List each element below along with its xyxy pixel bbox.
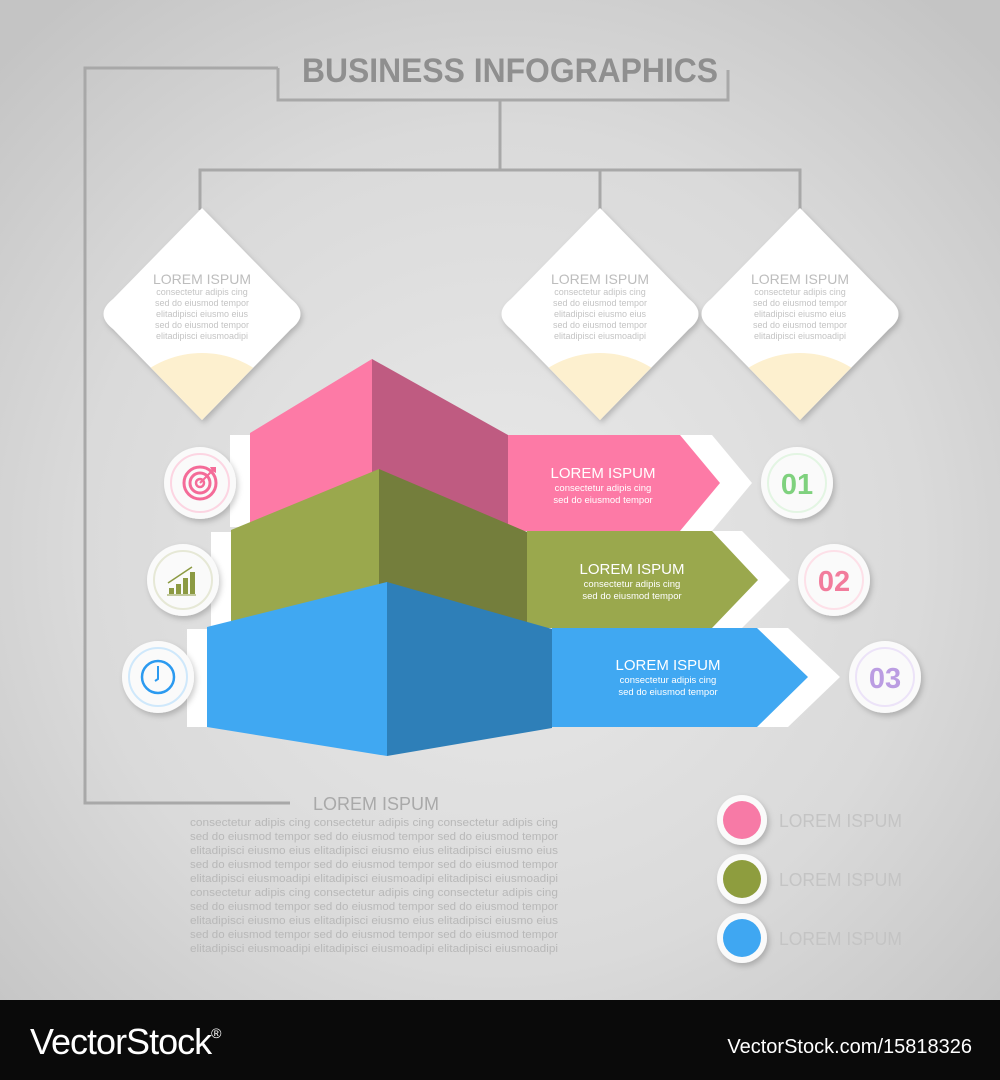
diamond card 1: sed do eiusmod tempor	[155, 298, 249, 308]
diamond card 2: consectetur adipis cing	[554, 287, 646, 297]
number 02	[798, 544, 870, 616]
diamond card 2: elitadipisci eiusmoadipi	[554, 331, 646, 341]
diamond card 3: sed do eiusmod tempor	[753, 320, 847, 330]
icon: clock	[122, 641, 194, 713]
bottom text block: elitadipisci eiusmoadipi elitadipisci eiusmoadipi elitadipisci eiusmoadipi	[190, 943, 558, 955]
number 02: 02	[818, 566, 850, 598]
diamond card 3: elitadipisci eiusmo eius	[754, 309, 847, 319]
diamond card 2: sed do eiusmod tempor	[553, 320, 647, 330]
footer bar	[0, 1000, 1000, 1080]
title: BUSINESS INFOGRAPHICS	[302, 52, 718, 90]
bar 2 green: LOREM ISPUM	[579, 561, 685, 578]
bottom text block: consectetur adipis cing consectetur adipis cing consectetur adipis cing	[190, 817, 558, 829]
bottom text block: sed do eiusmod tempor sed do eiusmod tempor sed do eiusmod tempor	[190, 929, 558, 941]
diamond card 3	[702, 208, 902, 424]
legend: LOREM ISPUM	[779, 929, 902, 949]
diamond card 3: LOREM ISPUM	[751, 271, 849, 287]
bottom text block: LOREM ISPUM	[313, 794, 439, 814]
legend: LOREM ISPUM	[779, 811, 902, 831]
bar 2 green: consectetur adipis cing	[584, 579, 680, 590]
bar 1 pink: sed do eiusmod tempor	[553, 495, 653, 506]
bottom text block: elitadipisci eiusmo eius elitadipisci eiusmo eius elitadipisci eiusmo eius	[190, 845, 558, 857]
number 01	[761, 447, 833, 519]
bar 1 pink	[230, 359, 752, 532]
bar 1 pink: LOREM ISPUM	[550, 465, 656, 482]
icon: target	[164, 447, 236, 519]
number 01: 01	[781, 469, 813, 501]
diamond card 1: elitadipisci eiusmo eius	[156, 309, 249, 319]
bottom text block: elitadipisci eiusmo eius elitadipisci eiusmo eius elitadipisci eiusmo eius	[190, 915, 558, 927]
bottom text block: sed do eiusmod tempor sed do eiusmod tempor sed do eiusmod tempor	[190, 831, 558, 843]
bottom text block: sed do eiusmod tempor sed do eiusmod tempor sed do eiusmod tempor	[190, 901, 558, 913]
diamond card 1: elitadipisci eiusmoadipi	[156, 331, 248, 341]
diamond card 1: consectetur adipis cing	[156, 287, 248, 297]
diamond card 3: consectetur adipis cing	[754, 287, 846, 297]
number 03	[849, 641, 921, 713]
diamond card 1	[104, 208, 304, 424]
number 03: 03	[869, 663, 901, 695]
bar 1 pink: consectetur adipis cing	[555, 483, 651, 494]
footer bar: VectorStock	[30, 1021, 211, 1062]
bar 3 blue: sed do eiusmod tempor	[618, 687, 718, 698]
diamond card 2	[502, 208, 702, 424]
legend	[717, 795, 902, 963]
legend: LOREM ISPUM	[779, 870, 902, 890]
diamond card 1: sed do eiusmod tempor	[155, 320, 249, 330]
bottom text block: consectetur adipis cing consectetur adipis cing consectetur adipis cing	[190, 887, 558, 899]
bar 2 green: sed do eiusmod tempor	[582, 591, 682, 602]
bar 3 blue: consectetur adipis cing	[620, 675, 716, 686]
connector lines	[85, 68, 800, 803]
diamond card 3: sed do eiusmod tempor	[753, 298, 847, 308]
footer bar: ®	[211, 1025, 222, 1041]
bar 3 blue: LOREM ISPUM	[615, 657, 721, 674]
bottom text block: sed do eiusmod tempor sed do eiusmod tempor sed do eiusmod tempor	[190, 859, 558, 871]
bottom text block	[190, 794, 558, 955]
diamond card 2: elitadipisci eiusmo eius	[554, 309, 647, 319]
diamond card 2: sed do eiusmod tempor	[553, 298, 647, 308]
footer bar: VectorStock.com/15818326	[727, 1036, 972, 1058]
diamond card 2: LOREM ISPUM	[551, 271, 649, 287]
diamond card 3: elitadipisci eiusmoadipi	[754, 331, 846, 341]
bar 3 blue	[187, 582, 840, 756]
bottom text block: elitadipisci eiusmoadipi elitadipisci eiusmoadipi elitadipisci eiusmoadipi	[190, 873, 558, 885]
diamond card 1: LOREM ISPUM	[153, 271, 251, 287]
bar 2 green	[211, 469, 790, 630]
icon: growth chart	[147, 544, 219, 616]
